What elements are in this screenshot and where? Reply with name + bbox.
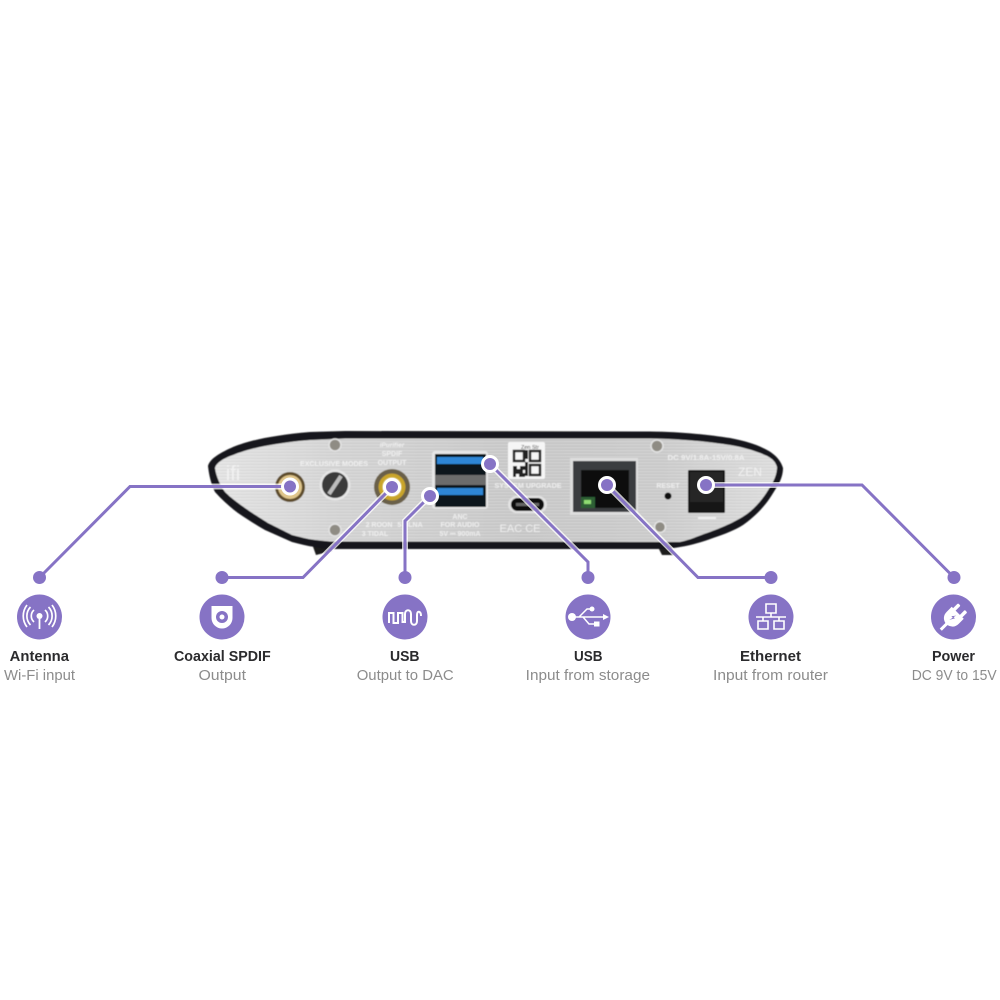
- item: power: [912, 594, 997, 684]
- line: ethernet: [607, 485, 771, 578]
- panel printed labels: FOR AUDIO: [440, 522, 480, 529]
- text: coaxial SPDIF: Output: [198, 667, 247, 684]
- DC power jack: [688, 470, 725, 519]
- text: antenna: Wi-Fi input: [4, 667, 76, 684]
- icon: antenna: [17, 594, 62, 640]
- panel printed labels: 5V ⎓ 900mA: [440, 531, 480, 538]
- icon: network: [748, 594, 794, 640]
- icon: plug: [931, 594, 976, 640]
- heading: coaxial SPDIF: Coaxial SPDIF: [174, 649, 271, 665]
- item: ethernet: [713, 594, 828, 684]
- text: USB input: Input from storage: [526, 667, 650, 684]
- panel printed labels: DC 9V/1.8A-15V/0.8A: [668, 455, 744, 462]
- brushed metal texture: [215, 438, 777, 542]
- USB-C port: [508, 496, 547, 513]
- text: ethernet: Input from router: [713, 667, 828, 684]
- line: power: [706, 485, 954, 578]
- silver faceplate: [215, 438, 777, 542]
- icon: coaxial: [200, 594, 244, 640]
- item: coaxial SPDIF: [174, 594, 271, 684]
- panel printed labels: RESET: [656, 483, 680, 490]
- heading: USB output: USB: [390, 649, 420, 665]
- heading: USB input: USB: [574, 649, 602, 665]
- panel printed labels: EAC CE: [500, 523, 540, 535]
- QR code: [508, 442, 545, 479]
- icon: digital waveform: [382, 594, 428, 640]
- panel screws: [329, 439, 666, 536]
- panel printed labels: ifi: [226, 463, 240, 485]
- panel printed labels: ZEN: [738, 465, 762, 479]
- device body: [208, 431, 783, 549]
- line: USB input: [490, 464, 588, 577]
- USB ports: [432, 451, 488, 509]
- mode dial: [320, 470, 350, 500]
- line: antenna: [40, 486, 291, 578]
- panel printed labels: 2 ROON: [366, 522, 392, 529]
- panel printed labels: iPurifier: [380, 442, 405, 449]
- heading: power: Power: [932, 649, 975, 665]
- panel printed labels: 5 DLNA: [397, 522, 423, 529]
- item: USB input: [526, 594, 650, 684]
- panel printed labels: EXCLUSIVE MODES: [300, 461, 368, 468]
- item: USB output: [357, 594, 454, 684]
- line: USB output: [405, 496, 430, 577]
- panel printed labels: SYSTEM UPGRADE: [494, 483, 562, 490]
- device: rear panel: [208, 431, 783, 555]
- Ethernet port: [570, 458, 638, 515]
- panel printed labels: SPDIF: [382, 451, 403, 458]
- heading: antenna: Antenna: [10, 649, 70, 665]
- coaxial connector: [374, 469, 410, 505]
- connector lines: [40, 464, 954, 578]
- panel printed labels: [226, 442, 762, 538]
- text: USB output: Output to DAC: [357, 667, 454, 684]
- panel printed labels: ANC: [452, 514, 468, 521]
- line: coaxial: [222, 487, 392, 578]
- line halos: [130, 464, 862, 577]
- QR code: Zen Str: [521, 445, 539, 451]
- panel printed labels: 3 TIDAL: [362, 531, 389, 538]
- heading: ethernet: Ethernet: [740, 649, 801, 665]
- connector end nodes: [33, 456, 960, 584]
- antenna connector: [275, 472, 305, 502]
- icon: USB: [566, 594, 610, 640]
- reset button: [664, 492, 672, 500]
- device feet: [311, 541, 675, 555]
- panel printed labels: OUTPUT: [378, 460, 407, 467]
- item: antenna: [4, 594, 76, 684]
